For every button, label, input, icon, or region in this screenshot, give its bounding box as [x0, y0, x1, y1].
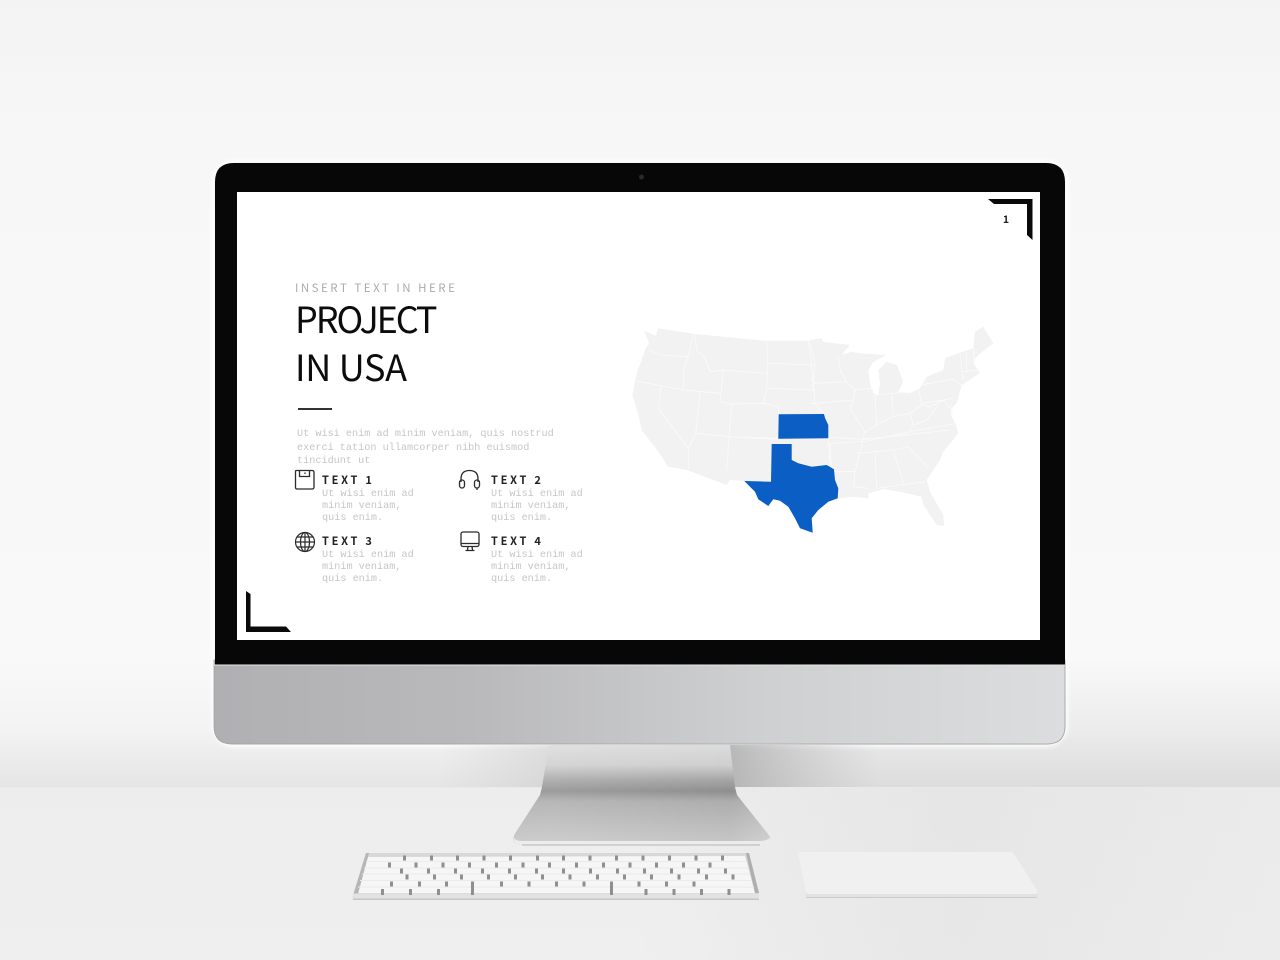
description: quis enim. [491, 513, 552, 524]
description [322, 488, 414, 524]
monitor stand [513, 745, 770, 846]
description: quis enim. [322, 513, 383, 524]
state borders: south [740, 430, 950, 488]
USA map [632, 327, 993, 533]
icon: globe [294, 532, 316, 552]
intro paragraph: exerci tation ullamcorper nibh euismod [297, 442, 529, 454]
page number: 1 [1003, 212, 1009, 227]
eyebrow text: INSERT TEXT IN HERE [295, 280, 457, 296]
icon: headphones [458, 470, 480, 490]
shadow behind stand [440, 745, 880, 787]
title: PROJECT [295, 292, 435, 344]
icon: floppy disk [294, 470, 315, 490]
monitor halo [214, 162, 1066, 745]
state borders: west [637, 333, 815, 470]
description: minim veniam, [491, 562, 570, 573]
description: Ut wisi enim ad [322, 550, 414, 561]
map: Kansas [778, 414, 828, 439]
desk tint right [640, 788, 1280, 960]
intro paragraph [297, 428, 554, 467]
item: text 4 [460, 531, 583, 585]
description: minim veniam, [322, 501, 401, 512]
description: Ut wisi enim ad [491, 489, 583, 500]
description [491, 550, 583, 585]
description: quis enim. [491, 574, 552, 585]
description: Ut wisi enim ad [322, 489, 414, 500]
description: quis enim. [322, 574, 383, 585]
description: minim veniam, [322, 562, 401, 573]
icon: monitor [460, 531, 480, 552]
heading: TEXT 4 [491, 533, 544, 549]
item: text 2 [458, 470, 583, 524]
map: Texas [744, 444, 838, 533]
monitor bezel [215, 163, 1065, 664]
heading: TEXT 2 [491, 472, 544, 488]
slide screen [237, 192, 1040, 640]
trackpad [798, 852, 1038, 898]
monitor chin [214, 660, 1065, 744]
description: minim veniam, [491, 501, 570, 512]
wall tint right [640, 660, 1280, 787]
heading: TEXT 1 [322, 472, 375, 488]
intro paragraph: Ut wisi enim ad minim veniam, quis nostrud [297, 429, 554, 440]
heading: TEXT 3 [322, 533, 375, 549]
title [295, 292, 436, 392]
map: continental USA [632, 327, 993, 533]
state borders: east [810, 343, 978, 468]
corner bracket: top right [988, 199, 1032, 240]
corner bracket: bottom left [246, 591, 291, 632]
description [322, 550, 414, 585]
description: Ut wisi enim ad [491, 550, 583, 561]
title rule [298, 408, 332, 410]
title: IN USA [295, 340, 407, 392]
item: text 1 [294, 470, 414, 524]
intro paragraph: tincidunt ut [297, 456, 370, 467]
keyboard [353, 853, 759, 900]
webcam [639, 174, 644, 180]
description [491, 488, 583, 524]
item: text 3 [294, 532, 414, 585]
